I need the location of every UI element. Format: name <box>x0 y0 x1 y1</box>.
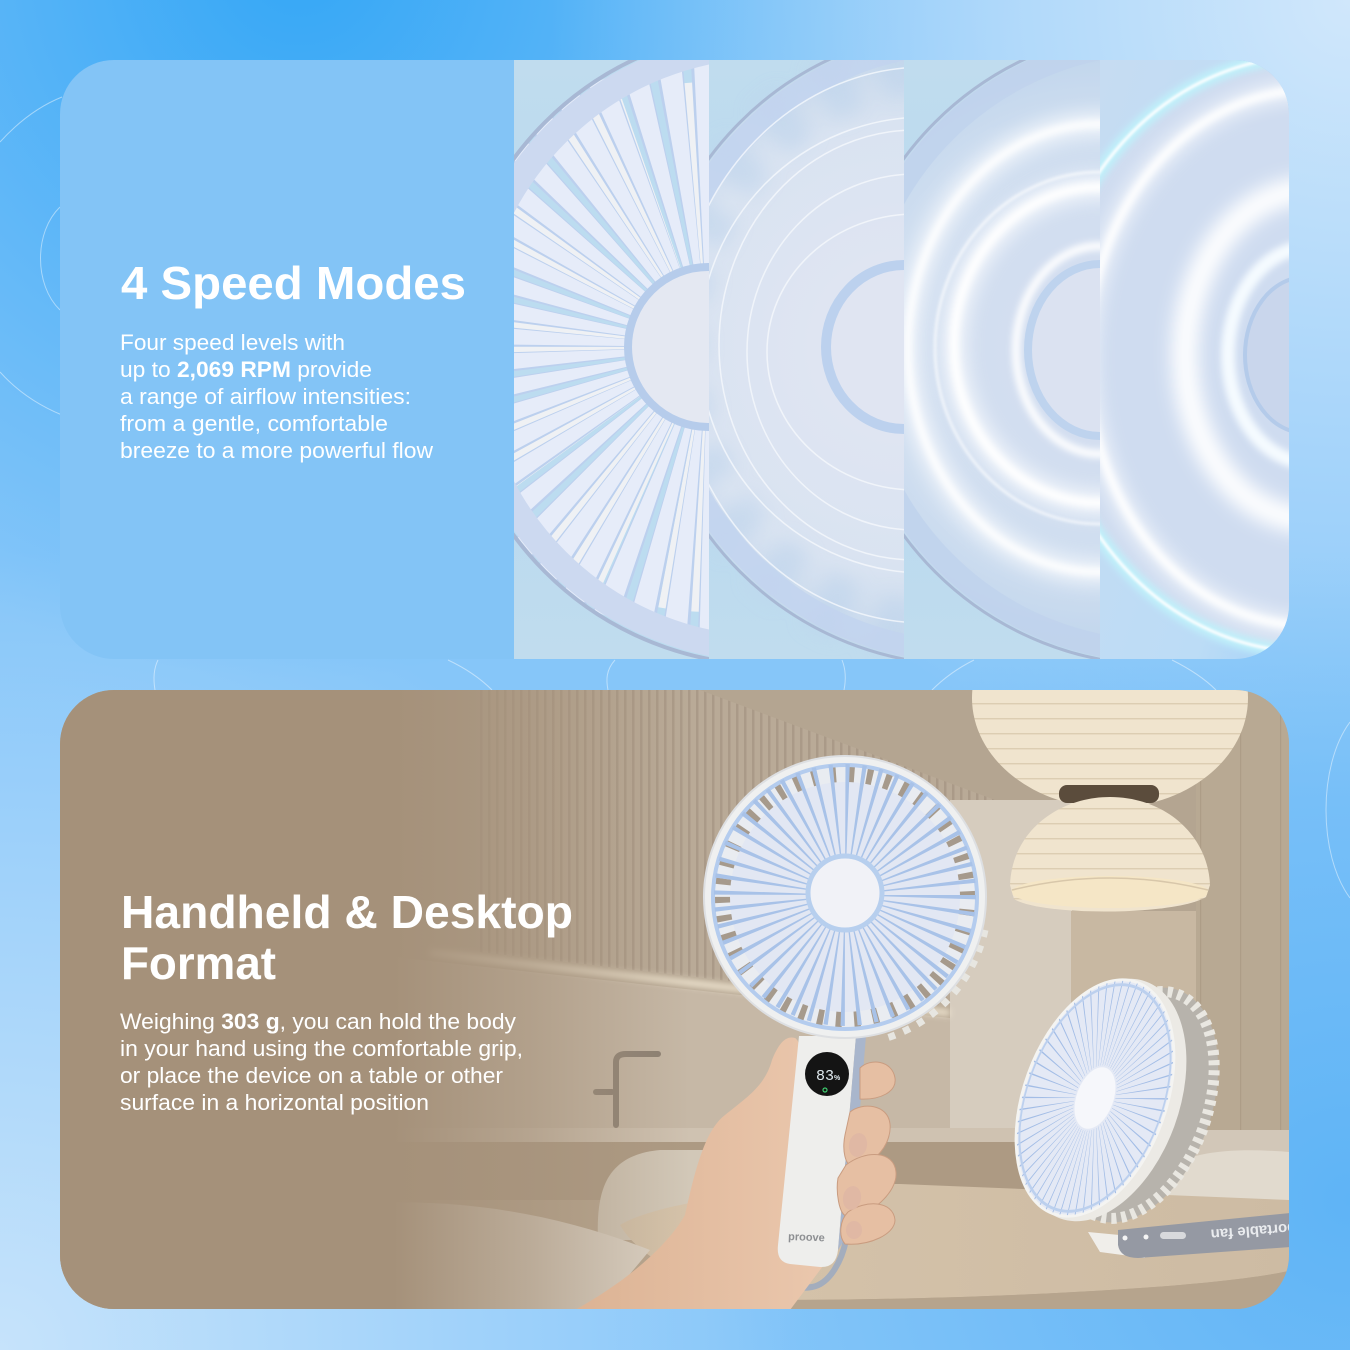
hand behind handle <box>575 1037 835 1310</box>
fan strip: speed 3 with bright rings <box>904 60 1100 659</box>
fan strip: speed 4 with glowing airflow <box>1100 60 1289 659</box>
left colour scrim <box>60 690 700 1309</box>
panel: 4 speed modes card <box>60 60 1289 659</box>
text block: format description: or place the device on a table or other <box>120 1063 503 1088</box>
text block: speed description: up to 2,069 RPM provide <box>120 357 372 382</box>
text block: format description: Weighing 303 g, you can hold the body <box>120 1009 516 1034</box>
desktop fan base with label <box>1088 1213 1297 1258</box>
handheld fan head <box>704 756 986 1040</box>
heading: 4 Speed Modes: 4 Speed Modes <box>121 257 466 309</box>
pendant lamp <box>972 690 1248 912</box>
handheld fan and hand <box>575 1036 896 1310</box>
fan strip: speed 1 with visible blades <box>514 60 709 659</box>
fan display <box>805 1052 849 1096</box>
room background photo <box>60 690 1290 1310</box>
heading: Handheld & Desktop Format: Format <box>121 937 276 989</box>
panel: handheld and desktop card <box>60 690 1289 1309</box>
fingers <box>837 1062 896 1244</box>
heading: Handheld & Desktop Format <box>124 894 572 980</box>
desktop fan <box>1014 978 1289 1258</box>
fan display: % <box>834 1075 841 1082</box>
text block: format description: in your hand using the comfortable grip, <box>120 1036 523 1061</box>
text block: speed description: breeze to a more powerful flow <box>120 438 433 463</box>
text block: speed description: Four speed levels with <box>120 330 345 355</box>
fan display: 83 <box>816 1068 834 1085</box>
text block: speed description: a range of airflow intensities: <box>120 384 411 409</box>
text block: format description: surface in a horizontal position <box>120 1090 429 1115</box>
text block: format description <box>120 1009 523 1115</box>
text block: speed description: from a gentle, comfortable <box>120 411 388 436</box>
brand label: proove <box>788 1231 825 1244</box>
fan handle <box>778 1036 856 1267</box>
fan strip: speed 2 with soft rings <box>709 60 904 659</box>
heading: Handheld & Desktop Format: Handheld & Desktop <box>121 886 573 938</box>
text block: speed description <box>120 330 433 463</box>
fan loop strap <box>804 1242 848 1291</box>
desktop fan base with label: portable fan <box>1210 1219 1297 1243</box>
